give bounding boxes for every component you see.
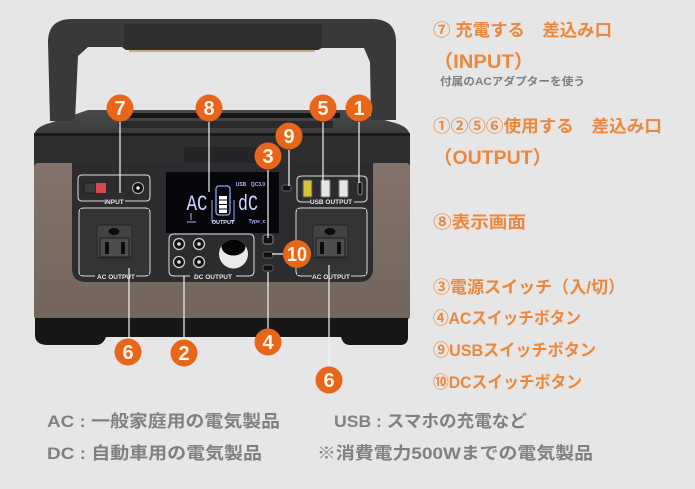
black base with feet [35,318,408,345]
callout 4: 4 [262,332,274,354]
legend: display screen: ⑧表示画面 [433,213,526,232]
callout 6 right [316,366,342,394]
callout 1: 1 [353,98,365,120]
legend: output heading [433,117,662,169]
LCD screen: Type_c [249,219,266,225]
AC OUTPUT right socket: AC OUTPUT [312,274,350,281]
AC OUTPUT right socket [296,208,367,281]
callout leader lines [120,122,359,368]
LCD screen: AC [186,192,208,217]
legend: power switch: ③電源スイッチ（入/切） [433,278,625,297]
carrying handle [48,19,396,121]
note: USB: USB : スマホの充電など [334,412,527,431]
callout 2 [170,340,198,366]
legend: input heading: ⑦ 充電する 差込み口 [433,21,612,40]
legend: output heading: （OUTPUT） [433,147,552,169]
power station device [34,19,410,345]
note: DC: DC : 自動車用の電気製品 [47,443,262,463]
legend: USB switch: ⑨USBスイッチボタン [433,341,596,360]
callout 3 [254,142,282,170]
callout 6 left: 6 [122,342,134,364]
callout 6 left [114,338,142,366]
legend: output heading: ①②⑤⑥使用する 差込み口 [433,117,662,136]
LCD screen: USB [236,182,247,188]
AC OUTPUT left socket [79,208,150,281]
callout 5: 5 [317,98,329,120]
top lid [34,110,410,145]
DC OUTPUT group [169,234,254,281]
note: power limit: ※消費電力500Wまでの電気製品 [317,444,593,463]
LCD screen [166,172,279,233]
callout 7: 7 [114,98,126,120]
INPUT port group: INPUT [104,199,124,206]
legend: DC switch: ⑩DCスイッチボタン [433,373,582,392]
LCD screen: dC [238,192,258,217]
black upper band [34,136,410,166]
USB OUTPUT group: USB OUTPUT [310,199,352,206]
callout 10 [283,240,311,268]
USB OUTPUT group [297,176,367,206]
callout 8: 8 [203,98,215,120]
callout 5 [310,94,336,122]
callout 4 [254,328,282,356]
legend: input heading [433,21,612,73]
DC OUTPUT group: DC OUTPUT [194,274,232,281]
callout 6 right: 6 [323,370,335,392]
front control panel [72,163,373,282]
note: AC: AC : 一般家庭用の電気製品 [47,411,280,431]
LCD screen: QC3.0 [251,182,265,188]
INPUT port group [78,175,150,206]
legend: adapter note: 付属のACアダプターを使う [440,74,585,88]
callout 9 [276,122,302,150]
brown casing [34,163,410,320]
legend: input heading: （INPUT） [433,51,534,73]
callout 8 [196,94,222,122]
callout 2: 2 [178,343,190,365]
callout 1 [346,94,372,122]
callout 3: 3 [262,146,274,168]
LCD screen: OUTPUT [212,220,235,226]
callout 9: 9 [283,126,295,148]
side switch buttons [263,185,291,271]
callout 10: 10 [287,244,307,266]
AC OUTPUT left socket: AC OUTPUT [97,274,135,281]
callout 7 [106,94,134,122]
legend: AC switch: ④ACスイッチボタン [433,309,581,328]
